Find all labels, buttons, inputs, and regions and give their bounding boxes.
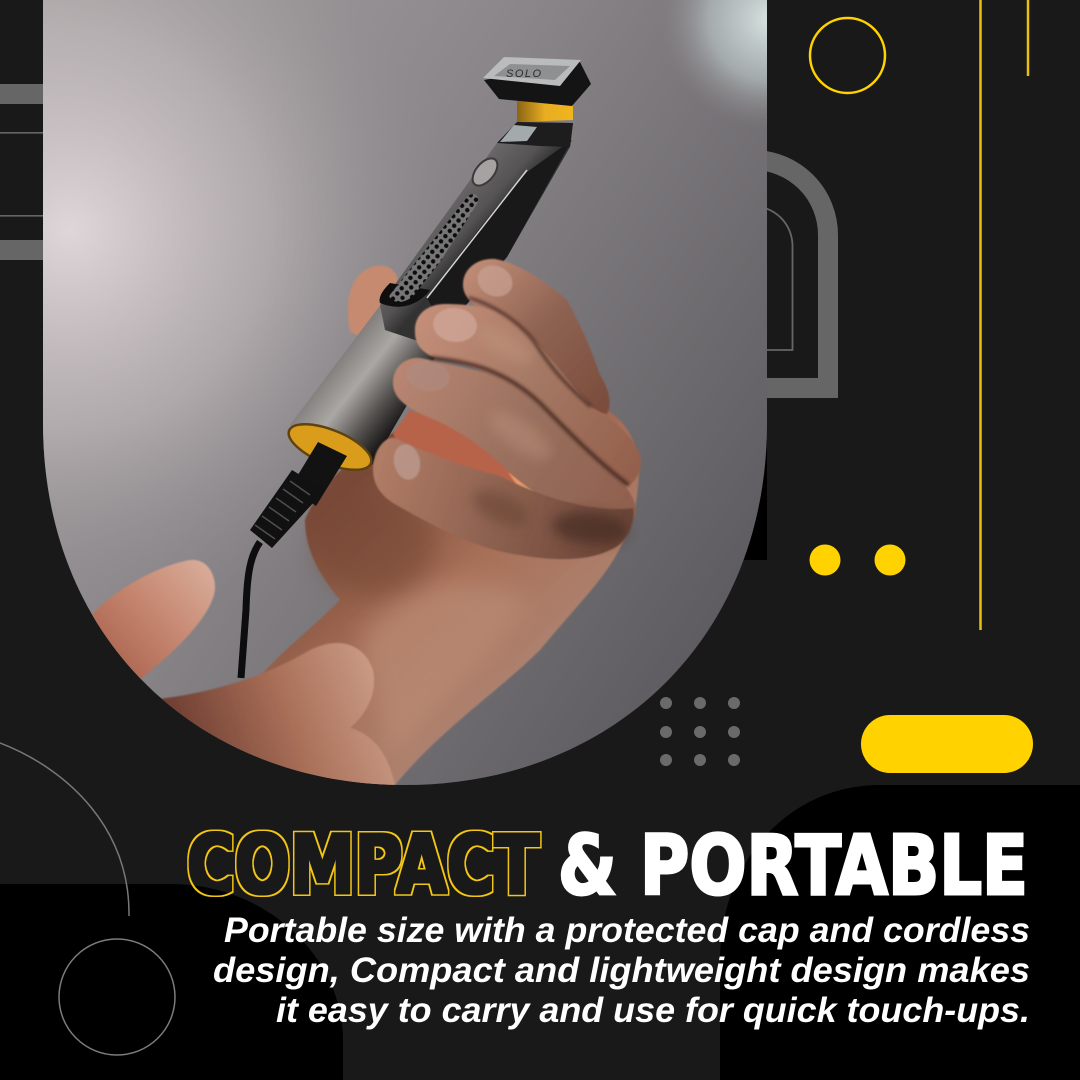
black side panel [427, 140, 572, 306]
fingernail three [406, 362, 450, 391]
back finger behind trimmer [348, 266, 399, 345]
title word: compact: COMPACT [187, 819, 539, 913]
title [187, 819, 1028, 914]
SOLO label: SOLO [506, 68, 543, 80]
black block behind photo edge [700, 440, 767, 560]
black shape: bottom left [0, 884, 343, 1080]
white highlight line [427, 170, 527, 298]
orange highlight [508, 472, 533, 491]
gray arch decoration [740, 160, 828, 388]
yellow vertical lines [980, 0, 1028, 630]
thin circle decoration [59, 939, 175, 1055]
description line one: Portable size with a protected cap and cordless [224, 911, 1030, 950]
foreground hand: left finger [86, 560, 215, 685]
thin arc decoration [0, 743, 129, 916]
thumb [373, 438, 633, 559]
neck dark band [497, 122, 573, 147]
foreground hand: lower finger [150, 643, 395, 790]
plug collar [298, 442, 347, 506]
description text [213, 911, 1030, 1030]
description line three: it easy to carry and use for quick touch-ups. [276, 991, 1030, 1030]
hand palm [262, 410, 640, 785]
yellow pill [861, 715, 1033, 773]
finger three highlight [494, 414, 549, 458]
head silver plate [483, 57, 581, 86]
fingernail two [433, 308, 478, 342]
orange glow between fingers [392, 410, 516, 483]
black shape: bottom right [720, 785, 1080, 1080]
photo backdrop [43, 0, 767, 785]
upper body [380, 122, 573, 345]
charging plug and cord [241, 442, 347, 678]
speaker grille dots [389, 194, 478, 302]
SOLO plate inset [494, 64, 570, 80]
description line two: design, Compact and lightweight design makes [213, 951, 1030, 990]
ridged plug [250, 470, 312, 548]
finger one [463, 259, 610, 414]
head black base [484, 62, 591, 106]
yellow dots [810, 544, 906, 576]
finger two [415, 304, 641, 486]
photo: hand holding trimmer [43, 0, 767, 790]
power button [472, 157, 498, 186]
cord [241, 542, 260, 678]
speaker grille recess [380, 283, 430, 307]
gold collar [517, 100, 573, 122]
gold end ring [287, 423, 372, 471]
finger two highlight [490, 335, 526, 360]
gray dot grid [660, 697, 740, 766]
lower metal body [290, 303, 445, 465]
left gray line decoration [0, 84, 44, 260]
palm shadow [315, 495, 435, 595]
neck highlight [500, 125, 537, 142]
plug ridges [255, 481, 310, 539]
finger creases [432, 298, 627, 484]
palm lit area [360, 581, 515, 734]
yellow outlined circle [810, 18, 885, 93]
thumb hair shadow [467, 483, 533, 533]
fingernail one [477, 265, 513, 297]
thumb knuckle shadow [551, 509, 629, 547]
trimmer [283, 57, 591, 479]
thumbnail [391, 442, 423, 482]
finger three [393, 358, 636, 529]
